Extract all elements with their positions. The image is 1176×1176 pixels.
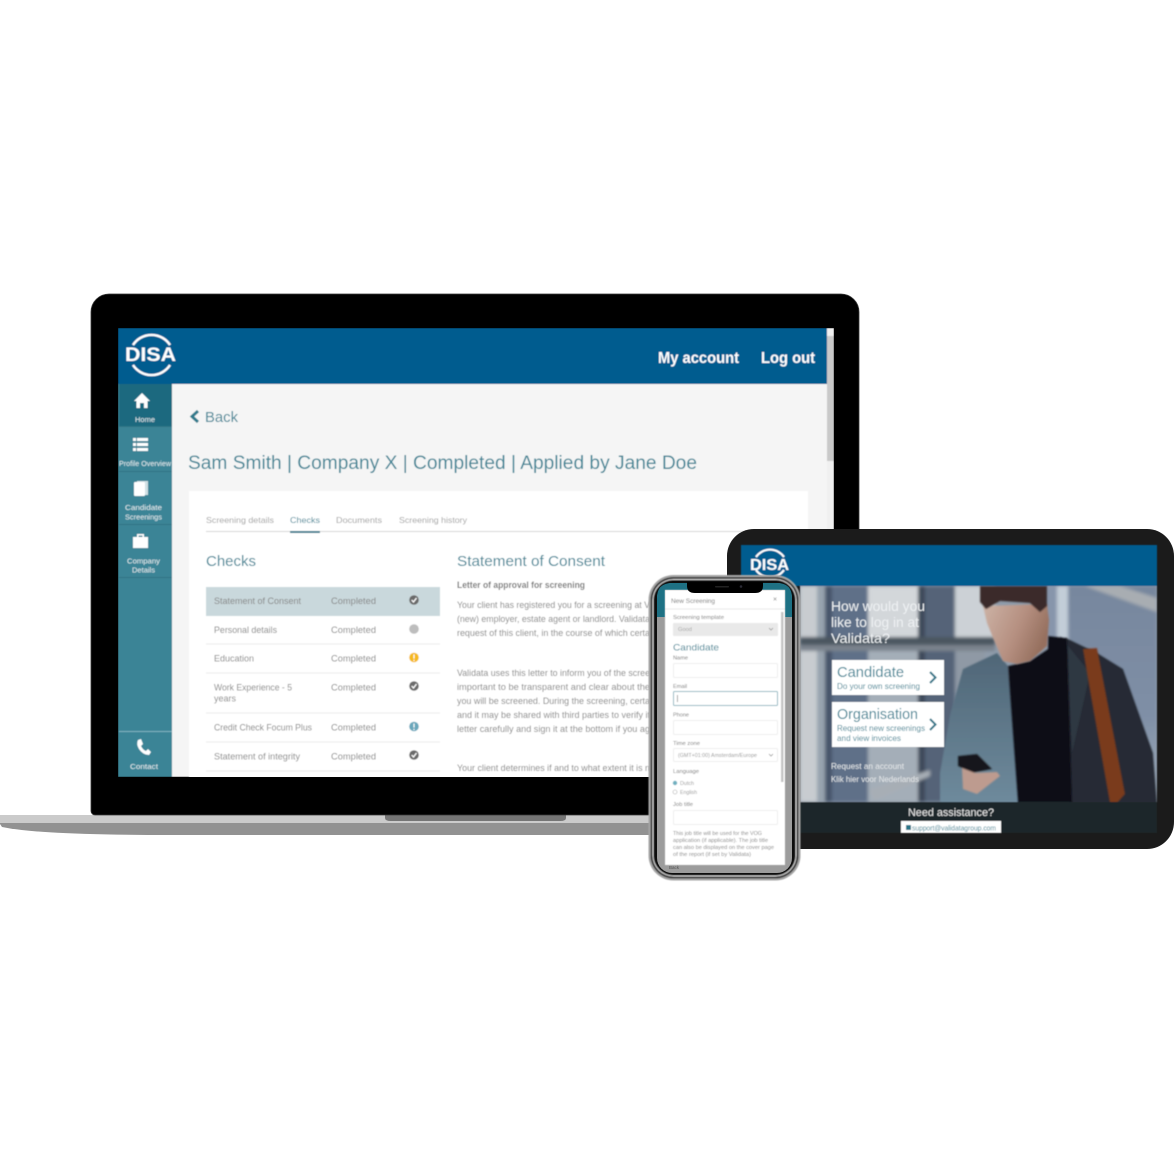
field: time zone [673, 741, 778, 762]
page title: Sam Smith | Company X | Completed | Applied by Jane Doe [188, 453, 697, 474]
laptop screen [118, 328, 834, 781]
row: Credit Check Focum Plus [214, 722, 419, 732]
phone screen [657, 583, 792, 873]
tabs [206, 516, 744, 534]
sidebar item: Candidate Screenings [125, 481, 162, 522]
row: Work Experience: Work Experience - 5 [214, 682, 292, 692]
field: screening template: Screening template [673, 615, 724, 621]
sidebar item: Candidate Screenings: Candidate [125, 503, 162, 512]
phone modal [665, 590, 785, 865]
support email button [901, 821, 1001, 833]
job title help text: This job title will be used for the VOG [673, 831, 762, 837]
field: screening template [673, 615, 778, 636]
row: Statement of Consent: Statement of Consent [214, 596, 301, 606]
login heading [831, 598, 925, 646]
field: time zone: (GMT+01:00) Amsterdam/Europe [678, 753, 757, 759]
consent text: Your client determines if and to what extent it is n [457, 763, 650, 773]
row: Education: Completed [331, 654, 376, 664]
row: Statement of integrity: Statement of integrity [214, 752, 301, 762]
tabs: Checks [290, 515, 320, 525]
row: Credit Check Focum Plus: Completed [331, 722, 376, 732]
row: Credit Check Focum Plus: Credit Check Focum Plus [214, 722, 312, 732]
link: Klik hier voor Nederlands: Klik hier voor Nederlands [831, 774, 919, 784]
laptop base [0, 815, 960, 835]
laptop [0, 294, 860, 835]
tablet screen [741, 545, 1157, 833]
need assistance text: Need assistance? [908, 807, 994, 819]
button: Candidate: Candidate [837, 665, 904, 681]
modal scrollbar [781, 612, 784, 782]
sidebar item: Profile Overview: Profile Overview [119, 459, 172, 468]
row: Personal details: Personal details [214, 625, 277, 635]
job title help text: can also be displayed on the cover page [673, 845, 774, 851]
field: screening template: Good [678, 627, 692, 633]
field: language: Language [673, 769, 699, 775]
tabs: Screening history [399, 515, 468, 525]
laptop bezel [91, 294, 859, 815]
login heading: Validata? [831, 630, 890, 646]
man's left jacket [940, 653, 1020, 803]
row: Statement of integrity: Completed [331, 752, 376, 762]
consent text: Your client has registered you for a screening at V [457, 600, 650, 610]
man's bag strap [1083, 648, 1125, 803]
consent text: and it may be shared with third parties to verify it [457, 710, 650, 720]
row: Personal details [214, 624, 419, 635]
consent text: Validata uses this letter to inform you of the scree [457, 668, 650, 678]
man's hand and phone [958, 754, 1000, 794]
photo: man with phone [800, 586, 1157, 803]
row: Work Experience: years [214, 694, 236, 704]
job title help text [673, 831, 774, 858]
button: Organisation: and view invoices [837, 733, 901, 743]
content card [189, 491, 808, 781]
page scrollbar [826, 336, 834, 462]
nav: Log out: Log out [761, 350, 815, 367]
logo: DISA: DISA [125, 345, 176, 366]
checks heading: Checks [206, 553, 256, 570]
consent text: you will be screened. During the screening, certa [457, 696, 650, 706]
button: Candidate [832, 660, 944, 695]
login heading: like to log in at [831, 614, 919, 630]
footer bar [800, 802, 1157, 833]
login heading: How would you [831, 598, 925, 614]
close icon: × [773, 596, 777, 604]
field: job title: Job title [673, 802, 693, 808]
sidebar item: Contact: Contact [130, 762, 159, 771]
tablet [727, 529, 1174, 849]
sidebar item: Home [119, 384, 172, 426]
sidebar item: Company Details: Company [127, 556, 160, 566]
back link: Back [205, 410, 239, 426]
job title help text: of the report (if set by Validata) [673, 852, 751, 858]
field: job title [673, 802, 778, 824]
man's right jacket [1066, 638, 1157, 803]
consent text: letter carefully and sign it at the bottom if you ag [457, 724, 650, 734]
statement of consent heading: Statement of Consent [457, 553, 606, 570]
consent text: important to be transparent and clear about the [457, 682, 650, 692]
support email button: support@validatagroup.com [912, 826, 996, 832]
row: Education [214, 653, 419, 664]
field: time zone: Time zone [673, 741, 700, 747]
field: name: Name [673, 656, 688, 662]
consent text [457, 600, 650, 773]
field: name [673, 656, 778, 678]
field: phone: Phone [673, 712, 689, 718]
job title help text: application (if applicable). The job title [673, 838, 768, 844]
link: Request an account: Request an account [831, 761, 905, 771]
phone body [648, 575, 800, 880]
phone teal background [657, 583, 792, 617]
button: Organisation [832, 702, 944, 747]
row: Personal details: Completed [331, 625, 376, 635]
phone [648, 575, 800, 880]
row: Statement of Consent: Completed [331, 596, 376, 606]
man's hair [980, 586, 1047, 612]
sidebar item: Company Details [127, 534, 160, 574]
sidebar item: Home: Home [135, 415, 155, 424]
sidebar item: Profile Overview [119, 438, 172, 468]
button: Candidate: Do your own screening [837, 681, 920, 691]
tablet logo: DISA: DISA [750, 557, 789, 574]
field: email: Email [673, 684, 687, 690]
field: language: Dutch [680, 781, 694, 787]
back label: Back [669, 865, 680, 870]
field: language: English [680, 790, 697, 796]
header bar [118, 328, 827, 384]
field: phone [673, 712, 778, 734]
row: Statement of integrity [214, 750, 419, 762]
checks table [206, 587, 440, 771]
tablet frame [727, 529, 1174, 849]
button: Organisation: Request new screenings [837, 723, 925, 733]
row: Work Experience: Completed [331, 682, 376, 692]
modal title: New Screening [671, 598, 715, 605]
tabs: Documents [336, 515, 382, 525]
back link [192, 410, 239, 426]
tablet header [741, 545, 1157, 586]
sidebar item: Contact [119, 731, 172, 771]
consent text: (new) employer, estate agent or landlord. Validata [457, 614, 650, 624]
logo: DISA [125, 335, 176, 375]
sidebar [118, 384, 172, 777]
man's face [983, 604, 1049, 664]
tabs: Screening details [206, 515, 274, 525]
sidebar item: Candidate Screenings: Screenings [125, 512, 162, 522]
row: Education: Education [214, 654, 254, 664]
row: Work Experience [214, 681, 419, 704]
button: Organisation: Organisation [837, 707, 918, 723]
sidebar item: Company Details: Details [132, 566, 155, 574]
field: language [673, 769, 699, 796]
row: Statement of Consent [214, 595, 419, 606]
field: email [673, 684, 778, 706]
man's shirt [1008, 636, 1072, 803]
phone notch [687, 582, 763, 593]
consent text: request of this client, in the course of which certa [457, 628, 650, 638]
man's lapel [1060, 636, 1088, 746]
candidate heading: Candidate [673, 642, 719, 654]
tablet logo: DISA [750, 550, 789, 577]
letter subheading: Letter of approval for screening [457, 580, 585, 590]
nav: My account: My account [658, 350, 739, 367]
